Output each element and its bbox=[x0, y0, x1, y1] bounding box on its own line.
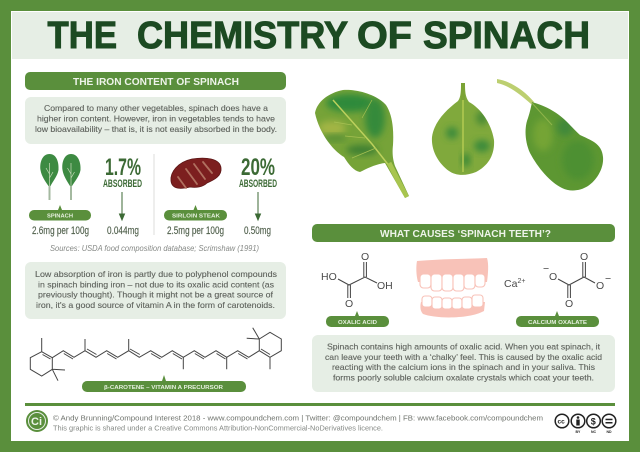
value: steak absorbed iron: 0.50mg bbox=[244, 225, 271, 237]
chart: beta-carotene molecule bbox=[30, 328, 281, 381]
text block: spinach teeth explanation: reacting with the calcium ions in the spinach and in your saliva. This bbox=[332, 363, 595, 372]
icon: creative commons badges bbox=[555, 414, 616, 434]
icon: creative commons badges: NC bbox=[591, 430, 597, 434]
text block: spinach teeth explanation: forms poorly soluble calcium oxalate crystals which coat your teeth. bbox=[333, 374, 594, 382]
stat: steak absorbed: 20% bbox=[241, 154, 275, 181]
stat: spinach absorbed: ABSORBED bbox=[103, 178, 142, 190]
value: spinach absorbed iron: 0.044mg bbox=[107, 225, 139, 237]
image: spinach leaf right bbox=[497, 79, 604, 190]
stat: spinach absorbed: 1.7% bbox=[105, 154, 141, 181]
footer text: This graphic is shared under a Creative Commons Attribution-NonCommercial-NoDerivatives licence. bbox=[53, 424, 383, 432]
icon: creative commons badges: ND bbox=[606, 430, 612, 434]
text block: iron intro: Compared to many other vegetables, spinach does have a bbox=[44, 104, 269, 113]
heading: spinach teeth: WHAT CAUSES ‘SPINACH TEETH’? bbox=[380, 228, 551, 240]
image: spinach leaf left bbox=[315, 90, 409, 198]
heading: spinach teeth bbox=[312, 224, 615, 242]
stat: steak absorbed bbox=[239, 154, 277, 190]
divider bbox=[154, 154, 155, 235]
arrow: spinach bbox=[120, 192, 124, 220]
icon: teeth bbox=[416, 258, 488, 317]
value: steak iron: 2.5mg per 100g bbox=[167, 225, 224, 237]
chart: oxalic acid bbox=[321, 251, 393, 310]
text block: spinach teeth explanation bbox=[312, 335, 615, 392]
label: sirloin steak bbox=[164, 205, 227, 220]
logo: compound interest bbox=[26, 410, 48, 432]
title: THE bbox=[48, 15, 117, 57]
chart: oxalic acid: O bbox=[345, 298, 353, 310]
heading: iron content: THE IRON CONTENT OF SPINACH bbox=[73, 76, 239, 88]
title: OF bbox=[357, 15, 412, 57]
label: calcium oxalate: CALCIUM OXALATE bbox=[528, 320, 587, 326]
heading: iron content bbox=[25, 72, 286, 90]
chart: calcium oxalate: O bbox=[549, 271, 557, 283]
stat: spinach absorbed bbox=[103, 154, 142, 190]
chart: calcium oxalate: O bbox=[580, 251, 588, 263]
chart: oxalic acid: O bbox=[361, 251, 369, 263]
title band bbox=[12, 12, 628, 59]
text: calcium ion: Ca bbox=[504, 278, 517, 290]
footer rule bbox=[25, 403, 615, 406]
text block: spinach teeth explanation: can leave your teeth with a ‘chalky’ feel. This is caused by the oxalic acid bbox=[325, 353, 602, 362]
text block: iron intro bbox=[25, 97, 286, 144]
text block: iron intro: low bioavailability – that is, it is not easily absorbed in the body. bbox=[35, 125, 277, 134]
text block: polyphenols: Low absorption of iron is partly due to polyphenol compounds bbox=[35, 270, 277, 279]
chart: calcium oxalate: O bbox=[565, 298, 573, 310]
title bbox=[48, 15, 590, 57]
chart: calcium oxalate: − bbox=[605, 273, 611, 285]
chart: calcium oxalate: O bbox=[596, 280, 604, 292]
text block: spinach teeth explanation: Spinach contains high amounts of oxalic acid. When you eat spinach, it bbox=[327, 342, 601, 352]
text block: polyphenols: iron, it's a good source of vitamin A in the form of carotenoids. bbox=[36, 301, 275, 310]
label: spinach: SPINACH bbox=[47, 214, 73, 220]
label: spinach bbox=[29, 205, 91, 220]
label: calcium oxalate bbox=[516, 311, 599, 327]
title: SPINACH bbox=[423, 15, 590, 57]
text block: polyphenols: in spinach binding iron – not due to its oxalic acid content (as bbox=[38, 280, 274, 290]
stat: steak absorbed: ABSORBED bbox=[239, 178, 277, 190]
text block: polyphenols: previously thought). Though it might not be a great source of bbox=[38, 290, 274, 300]
chart: oxalic acid: OH bbox=[377, 280, 393, 292]
label: beta-carotene bbox=[82, 375, 246, 392]
chart: calcium oxalate: − bbox=[543, 263, 549, 275]
icon: creative commons badges: BY bbox=[576, 430, 581, 434]
icon: sirloin steak bbox=[171, 158, 221, 188]
arrow: steak bbox=[256, 192, 260, 220]
logo: compound interest: Ci bbox=[31, 416, 42, 428]
icon: spinach leaves bbox=[40, 154, 81, 200]
footer text bbox=[53, 414, 543, 432]
footer text: © Andy Brunning/Compound Interest 2018 - www.compoundchem.com | Twitter: @compoundchem | FB: www.facebook.com/compoundchem bbox=[53, 414, 543, 422]
image: spinach leaf middle bbox=[432, 83, 494, 175]
value: spinach iron: 2.6mg per 100g bbox=[32, 225, 89, 237]
icon: creative commons badges: cc bbox=[558, 418, 565, 426]
text: calcium ion: 2+ bbox=[517, 278, 525, 285]
label: beta-carotene: β-CAROTENE – VITAMIN A PRECURSOR bbox=[104, 385, 224, 391]
chart: calcium oxalate bbox=[543, 251, 611, 310]
text block: polyphenols bbox=[25, 262, 286, 319]
sources: Sources: USDA food composition database; Scrimshaw (1991) bbox=[50, 244, 259, 253]
title: CHEMISTRY bbox=[137, 15, 348, 57]
label: oxalic acid bbox=[326, 311, 389, 327]
text block: iron intro: higher iron content. However, iron in vegetables tends to have bbox=[37, 114, 276, 124]
icon: creative commons badges: $ bbox=[591, 416, 596, 426]
label: oxalic acid: OXALIC ACID bbox=[338, 320, 377, 326]
chart: oxalic acid: HO bbox=[321, 271, 337, 283]
label: sirloin steak: SIRLOIN STEAK bbox=[172, 214, 221, 220]
